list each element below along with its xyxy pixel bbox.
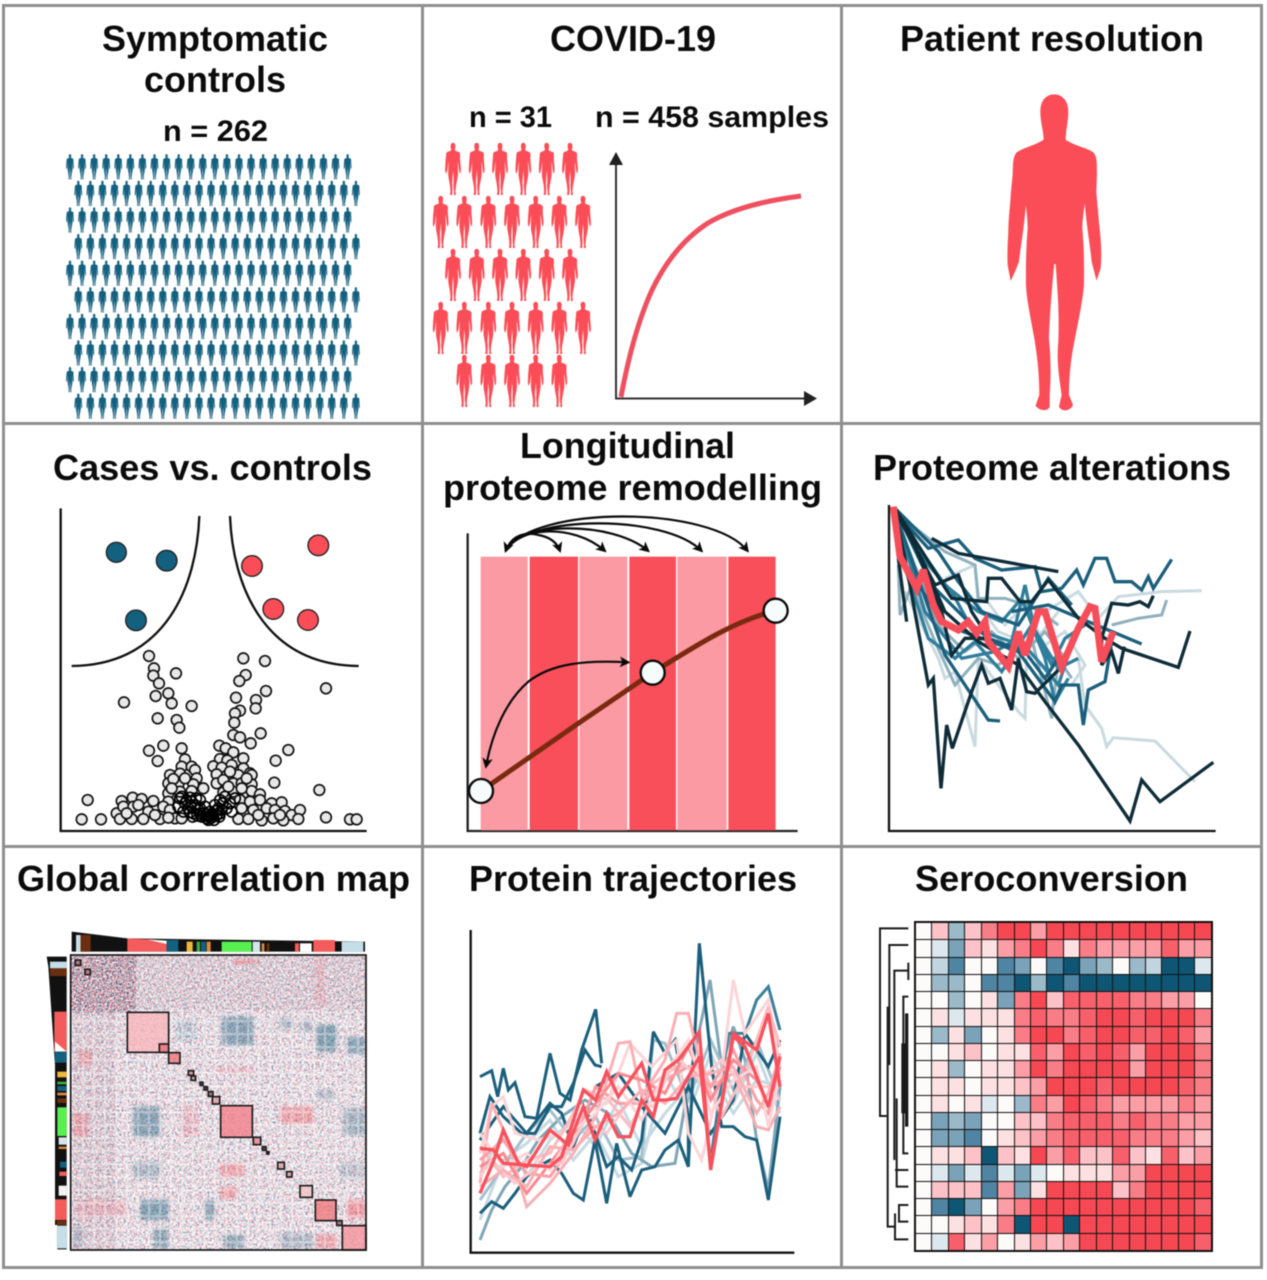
icon: human figure [1008,95,1101,410]
chart: proteome line plot [889,505,1216,831]
panel: proteome alterations [873,447,1231,833]
label: n = 31: n = 31 [469,101,552,134]
label: n = 458 samples: n = 458 samples [595,101,829,134]
heading: cases vs. controls: Cases vs. controls [53,447,372,488]
heading: protein trajectories: Protein trajectories [469,858,797,899]
panel: COVID-19 [432,18,829,408]
chart: sampling curve [609,152,817,406]
heading: patient resolution: Patient resolution [900,18,1204,59]
heatmap: seroconversion grid [914,921,1213,1252]
annotation bar: top module colours [72,932,365,952]
panel: patient resolution [900,18,1204,412]
chart: volcano plot [61,508,367,831]
heading: symptomatic controls [102,18,328,100]
icon grid: blue people [64,153,362,420]
panel: longitudinal proteome remodelling [443,425,822,833]
heading: symptomatic controls: controls [144,59,286,100]
arrows: time point comparisons [486,516,748,767]
heading: longitudinal proteome remodelling [443,425,822,508]
heading: symptomatic controls: Symptomatic [102,18,328,59]
icon grid: red people [433,143,591,407]
panel: global correlation map [17,858,410,1252]
panel: cases vs. controls [53,447,372,833]
panel: symptomatic controls [65,18,360,420]
chart: remodelling timeline [468,516,798,831]
heading: seroconversion: Seroconversion [915,858,1188,899]
panel: protein trajectories [468,858,797,1255]
heading: proteome alterations: Proteome alterations [873,447,1231,488]
heading: COVID-19: COVID-19 [550,18,716,59]
heatmap: correlation matrix [71,955,366,1250]
heading: longitudinal proteome remodelling: Longitudinal [520,425,735,466]
chart: trajectory line plot [471,930,794,1253]
label: n = 262: n = 262 [163,115,268,148]
panel: seroconversion [878,858,1214,1253]
dendrogram [880,928,908,1239]
heading: longitudinal proteome remodelling: proteome remodelling [443,467,822,508]
annotation bar: left module colours [47,957,67,1249]
heading: global correlation map: Global correlation map [17,858,410,899]
